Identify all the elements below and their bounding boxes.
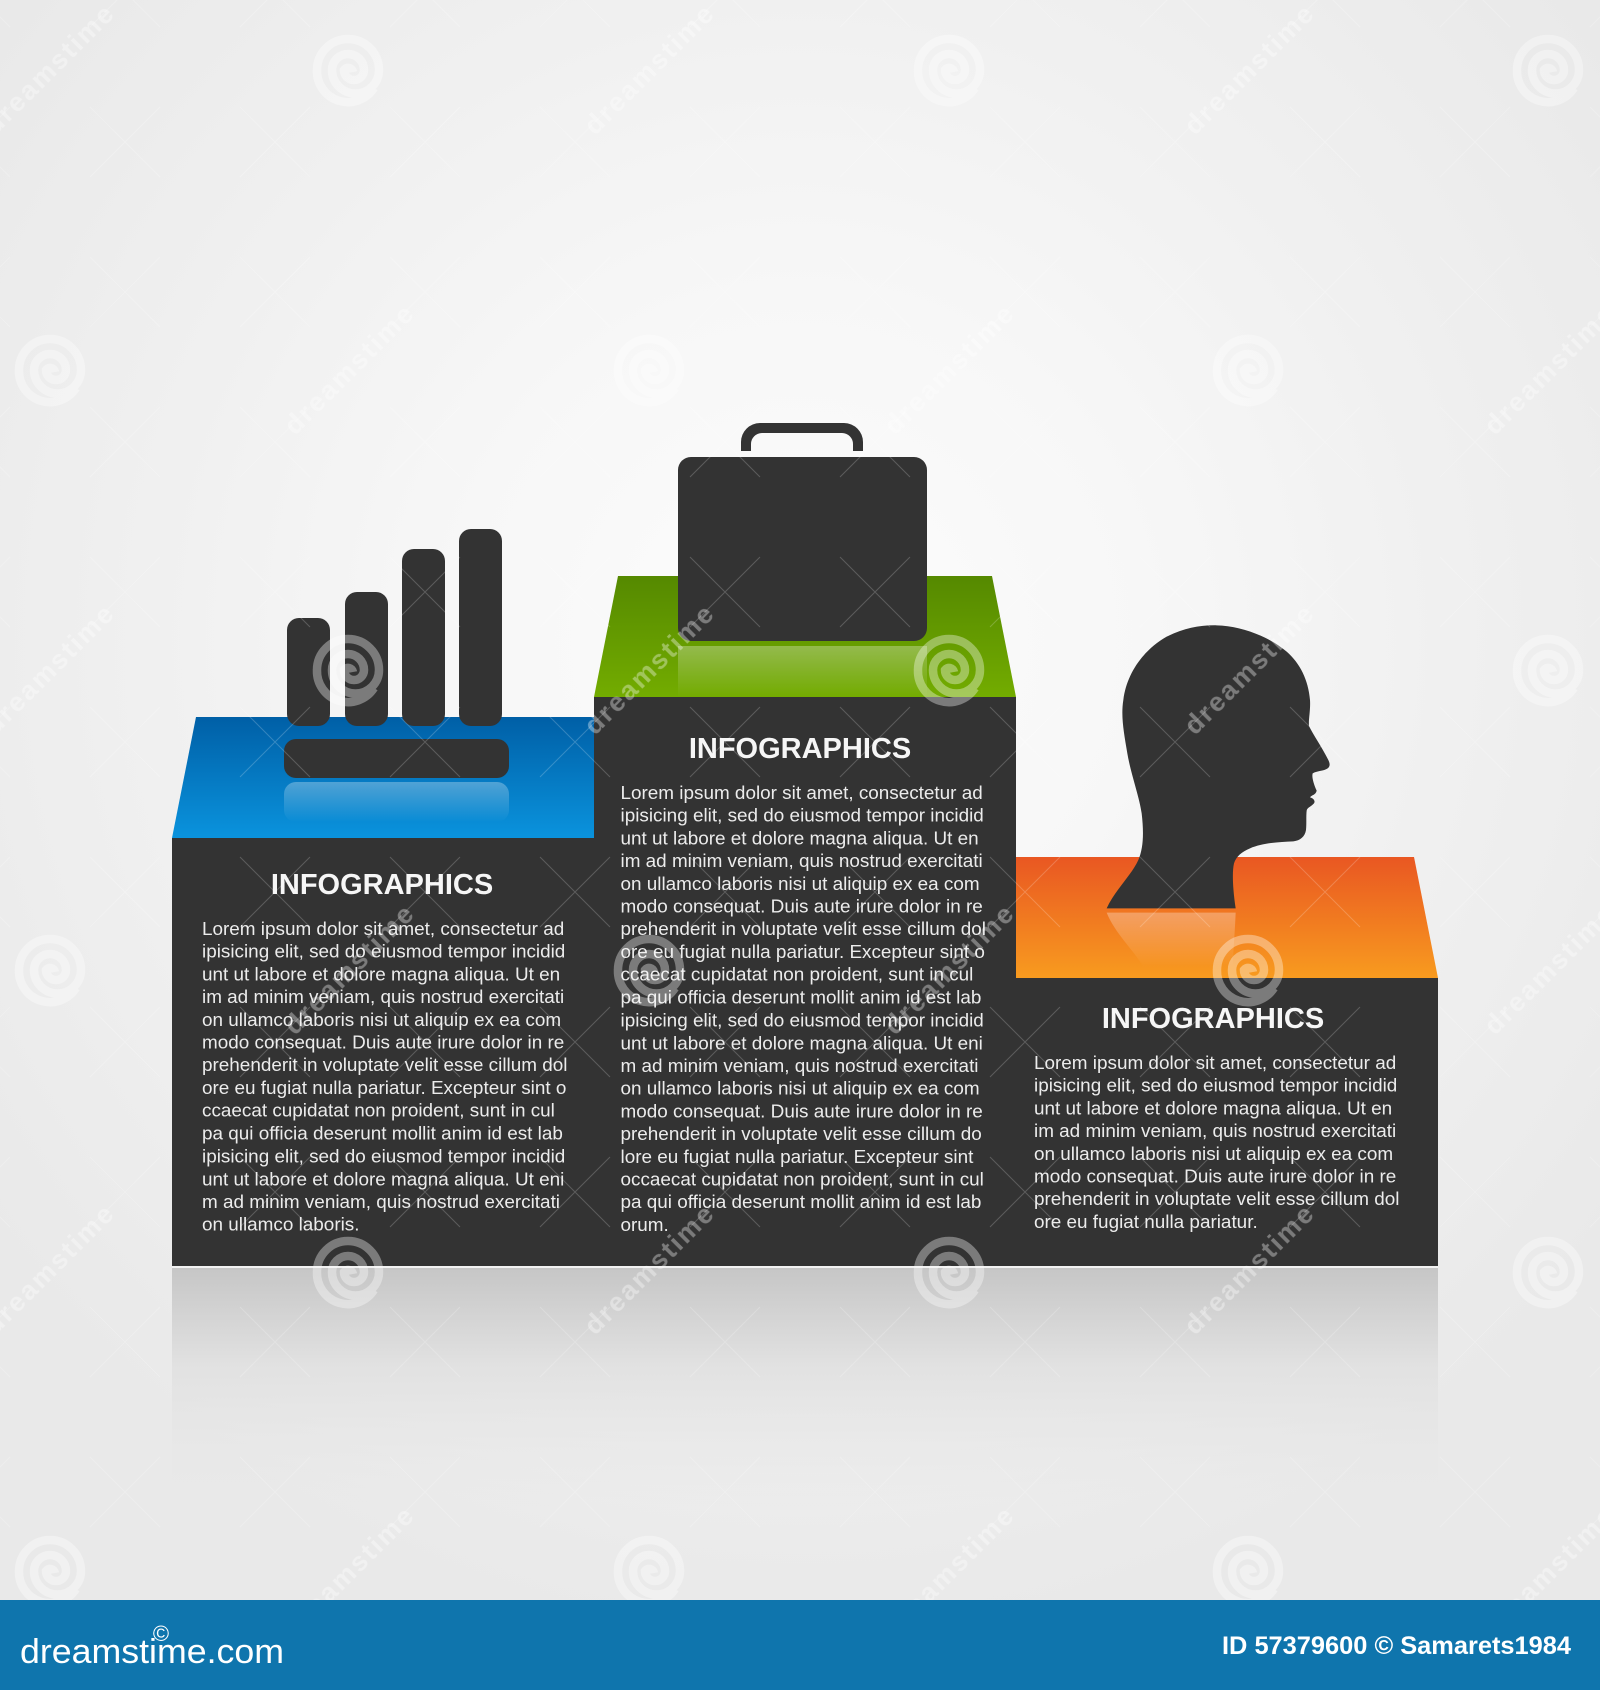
heading left: INFOGRAPHICS (271, 869, 493, 901)
watermark overlay: dreamstime (878, 299, 1019, 440)
panel: right step (1016, 857, 1438, 1266)
body text left: ccaecat cupidatat non proident, sunt in cul (202, 1101, 555, 1122)
footer logo: dreamstime.com (20, 1633, 284, 1671)
footer banner (0, 1600, 1600, 1690)
body text right: on ullamco laboris nisi ut aliquip ex ea com (1034, 1144, 1393, 1165)
body text middle: prehenderit in voluptate velit esse cillum do (620, 1124, 982, 1145)
panel: left step (172, 717, 594, 1266)
body text middle: ipisicing elit, sed do eiusmod tempor incidid (620, 1011, 984, 1032)
watermark overlay: dreamstime (278, 1501, 419, 1642)
body text right: ipisicing elit, sed do eiusmod tempor incidid (1034, 1076, 1397, 1097)
watermark overlay: dreamstime (278, 899, 419, 1040)
body text left: on ullamco laboris nisi ut aliquip ex ea com (202, 1010, 561, 1031)
body text left: modo consequat. Duis aute irure dolor in re (202, 1032, 564, 1054)
floor reflection (172, 1268, 1438, 1508)
body text middle: on ullamco laboris nisi ut aliquip ex ea com (620, 1079, 980, 1100)
body text left: unt ut labore et dolore magna aliqua. Ut en (202, 964, 560, 985)
orange platform (1016, 857, 1438, 978)
body text middle: ore eu fugiat nulla pariatur. Excepteur sint o (620, 942, 985, 963)
panel: middle step (594, 576, 1016, 1266)
body text middle: lore eu fugiat nulla pariatur. Excepteur sint (620, 1147, 974, 1168)
watermark overlay: dreamstime (1178, 599, 1319, 740)
heading middle: INFOGRAPHICS (689, 733, 911, 765)
body text middle: orum. (620, 1215, 669, 1236)
body text right: unt ut labore et dolore magna aliqua. Ut en (1034, 1098, 1392, 1119)
watermark overlay: dreamstime (578, 1199, 719, 1340)
blue platform (172, 717, 594, 838)
body text middle: m ad minim veniam, quis nostrud exercitati (620, 1056, 979, 1077)
floor edge line (172, 1266, 1438, 1268)
body text middle: on ullamco laboris nisi ut aliquip ex ea com (620, 874, 980, 895)
footer logo mark: © (153, 1621, 169, 1646)
body text left: ore eu fugiat nulla pariatur. Excepteur sint o (202, 1078, 566, 1099)
watermark overlay: dreamstime (278, 299, 419, 440)
body text middle: unt ut labore et dolore magna aliqua. Ut eni (620, 1033, 983, 1054)
dark panel right (1016, 978, 1438, 1266)
watermark overlay: dreamstime (1178, 1199, 1319, 1340)
body text left: m ad minim veniam, quis nostrud exercitati (202, 1192, 560, 1213)
body text right: modo consequat. Duis aute irure dolor in re (1034, 1166, 1396, 1188)
body text middle: pa qui officia deserunt mollit anim id est lab (620, 1192, 981, 1213)
body text left: Lorem ipsum dolor sit amet, consectetur ad (202, 919, 564, 940)
icon: briefcase (678, 423, 927, 697)
body text left: pa qui officia deserunt mollit anim id est lab (202, 1123, 563, 1144)
watermark overlay: dreamstime (878, 899, 1019, 1040)
icon: head silhouette (1107, 625, 1330, 967)
body text left: ipisicing elit, sed do eiusmod tempor incidid (202, 942, 565, 963)
watermark overlay: dreamstime (578, 599, 719, 740)
body text middle: modo consequat. Duis aute irure dolor in re (620, 1101, 983, 1122)
green platform (594, 576, 1016, 697)
body text middle: unt ut labore et dolore magna aliqua. Ut en (620, 828, 979, 849)
body text middle: prehenderit in voluptate velit esse cillum dol (620, 919, 986, 940)
footer credit: ID 57379600 © Samarets1984 (1222, 1632, 1571, 1660)
body text right: im ad minim veniam, quis nostrud exercitati (1034, 1121, 1396, 1142)
body text left: prehenderit in voluptate velit esse cillum dol (202, 1055, 567, 1076)
body text right: prehenderit in voluptate velit esse cillum dol (1034, 1189, 1399, 1210)
watermark overlay: dreamstime (1178, 0, 1319, 140)
body text middle: pa qui officia deserunt mollit anim id est lab (620, 987, 981, 1008)
body text left: im ad minim veniam, quis nostrud exercitati (202, 987, 564, 1008)
body text left: ipisicing elit, sed do eiusmod tempor incidid (202, 1147, 565, 1168)
body text middle: im ad minim veniam, quis nostrud exercitati (620, 851, 983, 872)
body text middle: modo consequat. Duis aute irure dolor in re (620, 896, 983, 918)
watermark overlay: dreamstime (878, 1501, 1019, 1642)
dark panel left (172, 838, 594, 1266)
watermark overlay: dreamstime (578, 0, 719, 140)
icon: bar chart (284, 529, 509, 822)
body text left: unt ut labore et dolore magna aliqua. Ut eni (202, 1169, 564, 1190)
body text right: Lorem ipsum dolor sit amet, consectetur ad (1034, 1053, 1396, 1074)
body text middle: ccaecat cupidatat non proident, sunt in cul (620, 965, 973, 986)
body text middle: Lorem ipsum dolor sit amet, consectetur ad (620, 783, 983, 804)
body text left: on ullamco laboris. (202, 1215, 360, 1236)
dark panel middle (594, 697, 1016, 1266)
body text middle: occaecat cupidatat non proident, sunt in cul (620, 1170, 984, 1190)
body text middle: ipisicing elit, sed do eiusmod tempor incidid (620, 806, 984, 827)
body text right: ore eu fugiat nulla pariatur. (1034, 1212, 1258, 1233)
heading right: INFOGRAPHICS (1102, 1003, 1324, 1035)
